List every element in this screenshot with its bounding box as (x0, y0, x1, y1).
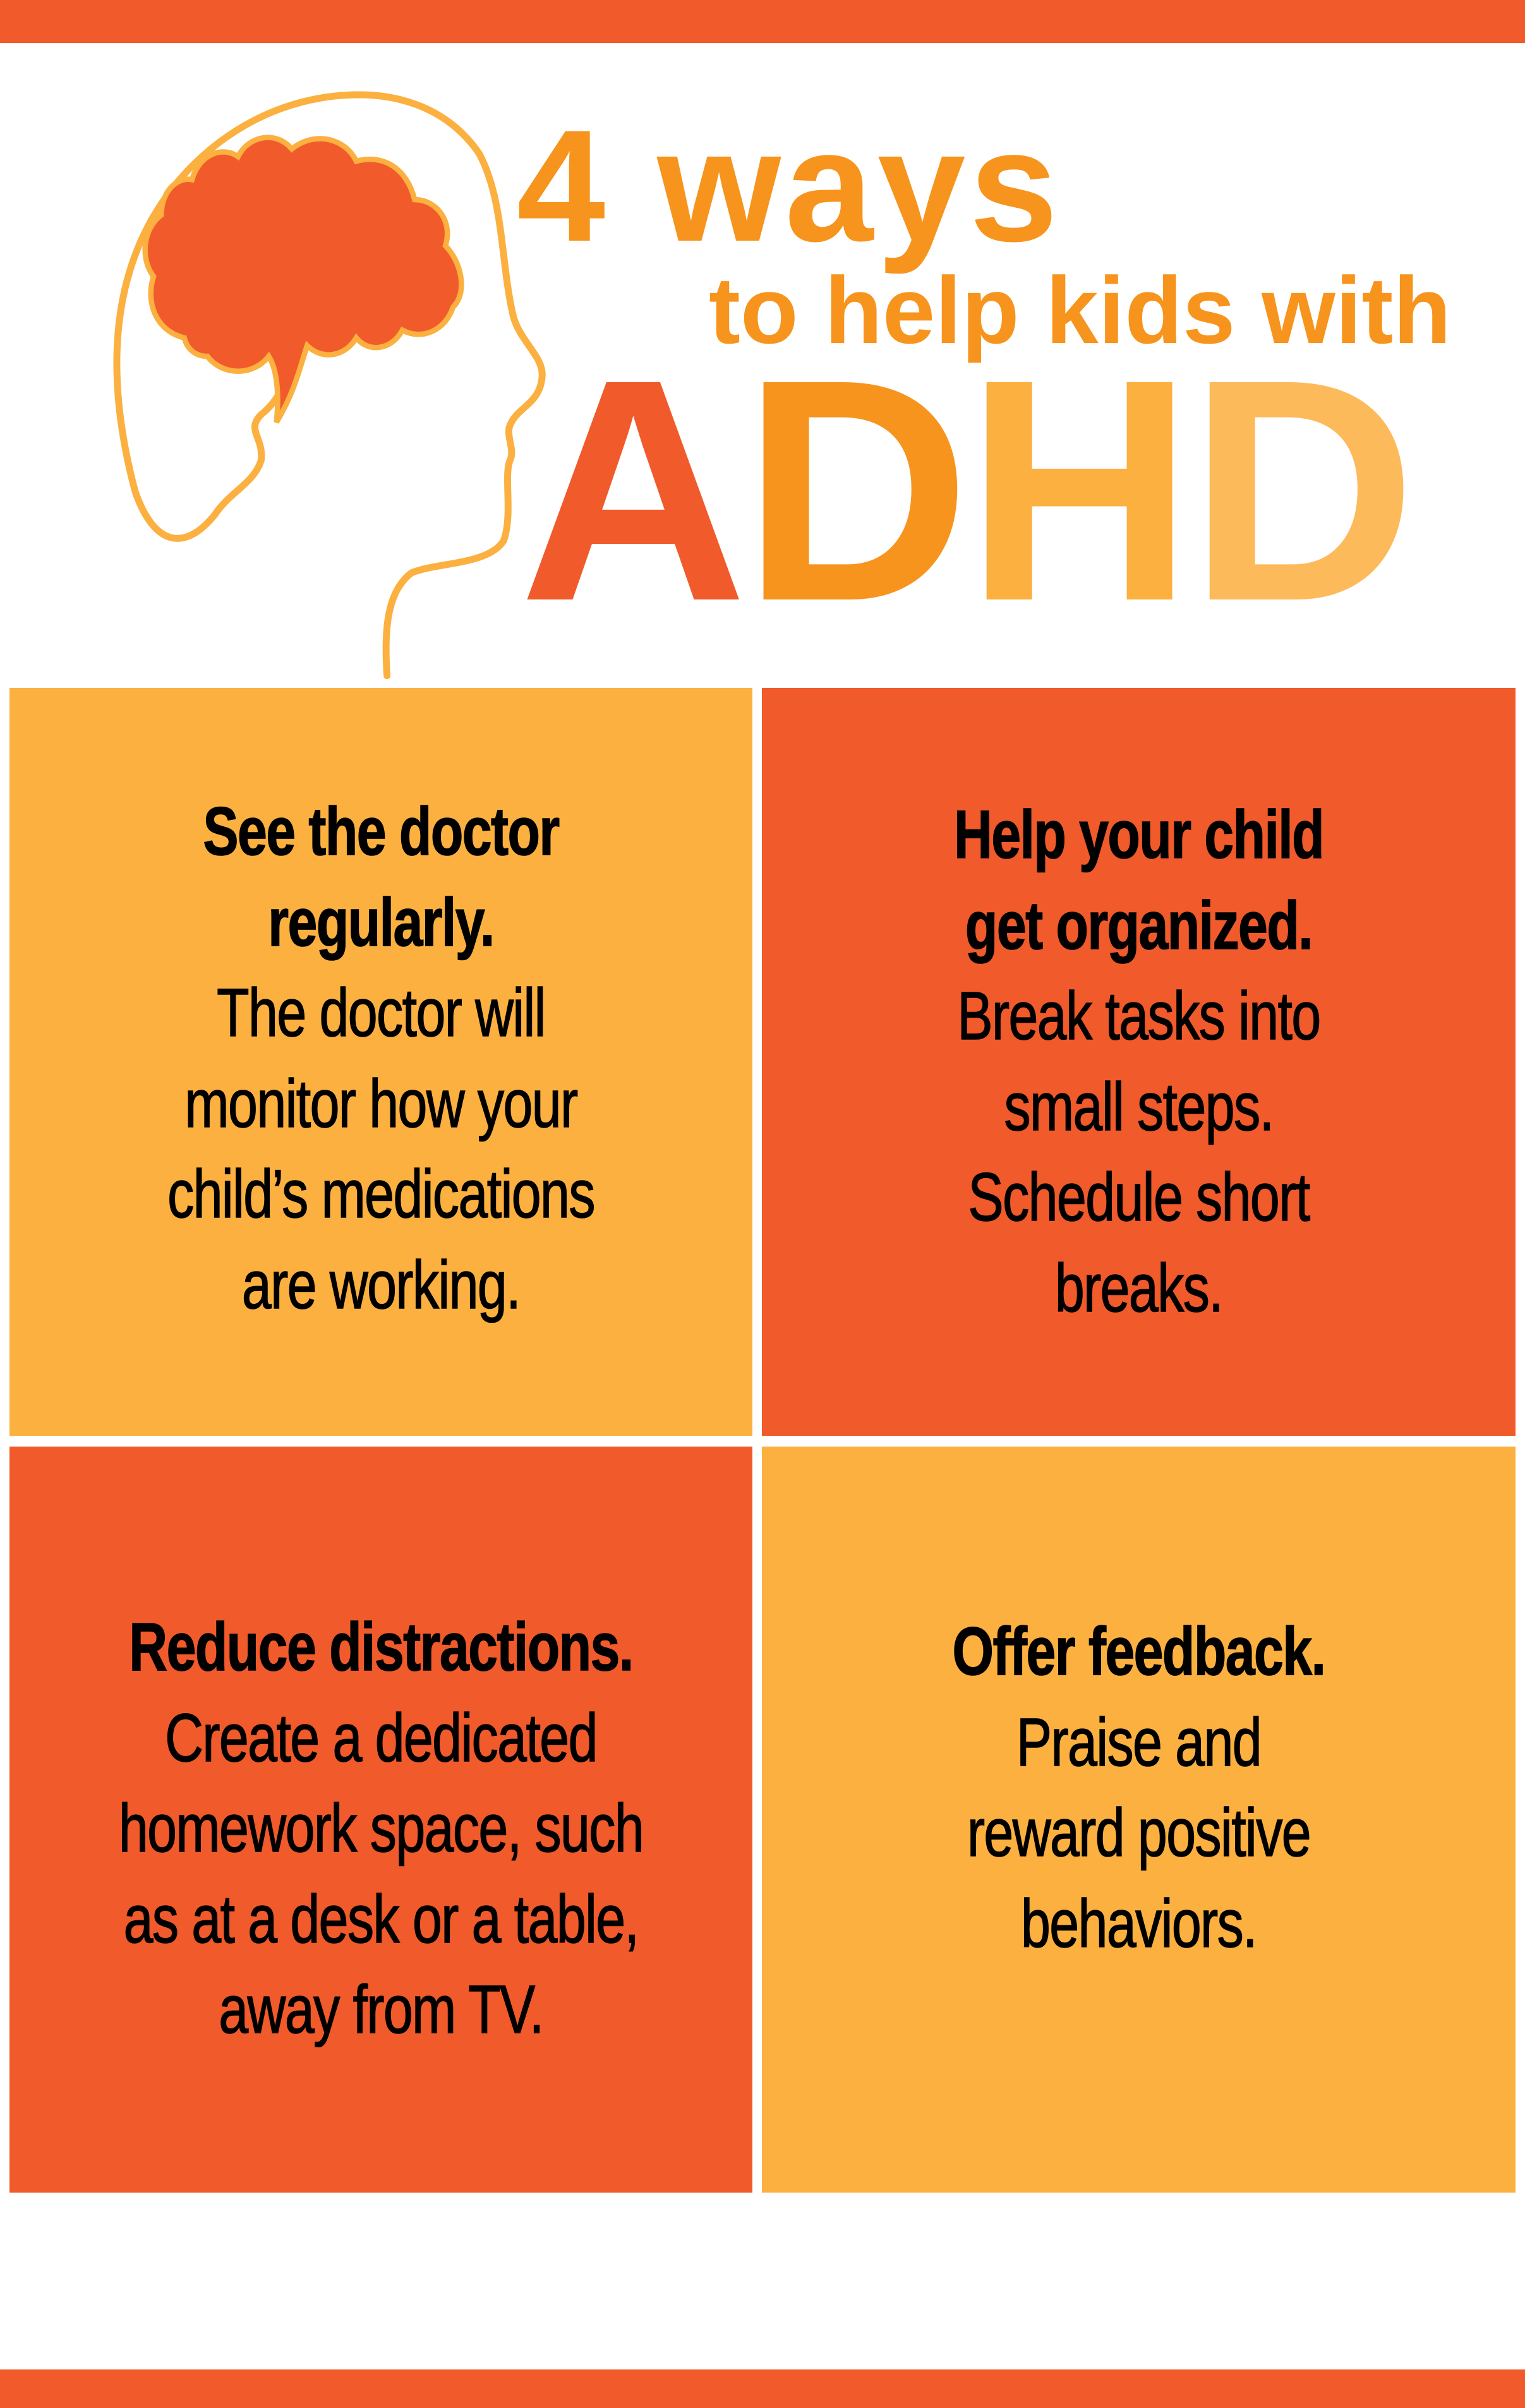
text: see the doctor: monitor how your (184, 1065, 577, 1141)
panel: see the doctor (9, 688, 752, 1436)
text: offer feedback: Offer feedback. (953, 1613, 1325, 1689)
text: offer feedback (953, 1613, 1325, 1961)
panel: reduce distractions (9, 1447, 752, 2193)
text: offer feedback: behaviors. (1021, 1885, 1257, 1961)
text: reduce distractions: as at a desk or a table, (124, 1880, 638, 1957)
text: reduce distractions: Create a dedicated (165, 1699, 597, 1775)
text: offer feedback: Praise and (1016, 1703, 1261, 1780)
text: get organized: small steps. (1004, 1068, 1274, 1145)
icon: brain (145, 138, 461, 423)
text: reduce distractions: homework space, such (119, 1790, 643, 1866)
top bar (0, 0, 1525, 43)
text: get organized (954, 796, 1323, 1325)
text: get organized: Break tasks into (957, 977, 1320, 1054)
title: ADHD: ADHD (519, 313, 1411, 666)
text: get organized: breaks. (1055, 1249, 1222, 1325)
text: see the doctor: The doctor will (217, 974, 545, 1050)
title: 4 ways: 4 ways (517, 97, 1062, 275)
text: see the doctor: regularly. (268, 883, 494, 960)
icon: head outline (117, 95, 542, 676)
title: to help kids with: to help kids with (709, 257, 1451, 363)
text: reduce distractions: Reduce distractions. (129, 1608, 633, 1685)
text: see the doctor: are working. (242, 1246, 520, 1323)
text: offer feedback: reward positive (967, 1794, 1310, 1870)
text: see the doctor: See the doctor (203, 793, 559, 869)
panel: offer feedback (762, 1447, 1516, 2193)
text: see the doctor (167, 793, 594, 1323)
text: see the doctor: child’s medications (167, 1155, 594, 1232)
head illustration (113, 91, 546, 680)
text: reduce distractions: away from TV. (219, 1971, 543, 2047)
panel: get organized (762, 688, 1516, 1436)
text: get organized: Help your child (954, 796, 1323, 872)
text: get organized: get organized. (965, 887, 1312, 963)
text: reduce distractions (119, 1608, 643, 2047)
bottom bar (0, 2369, 1525, 2408)
text: get organized: Schedule short (968, 1159, 1310, 1235)
